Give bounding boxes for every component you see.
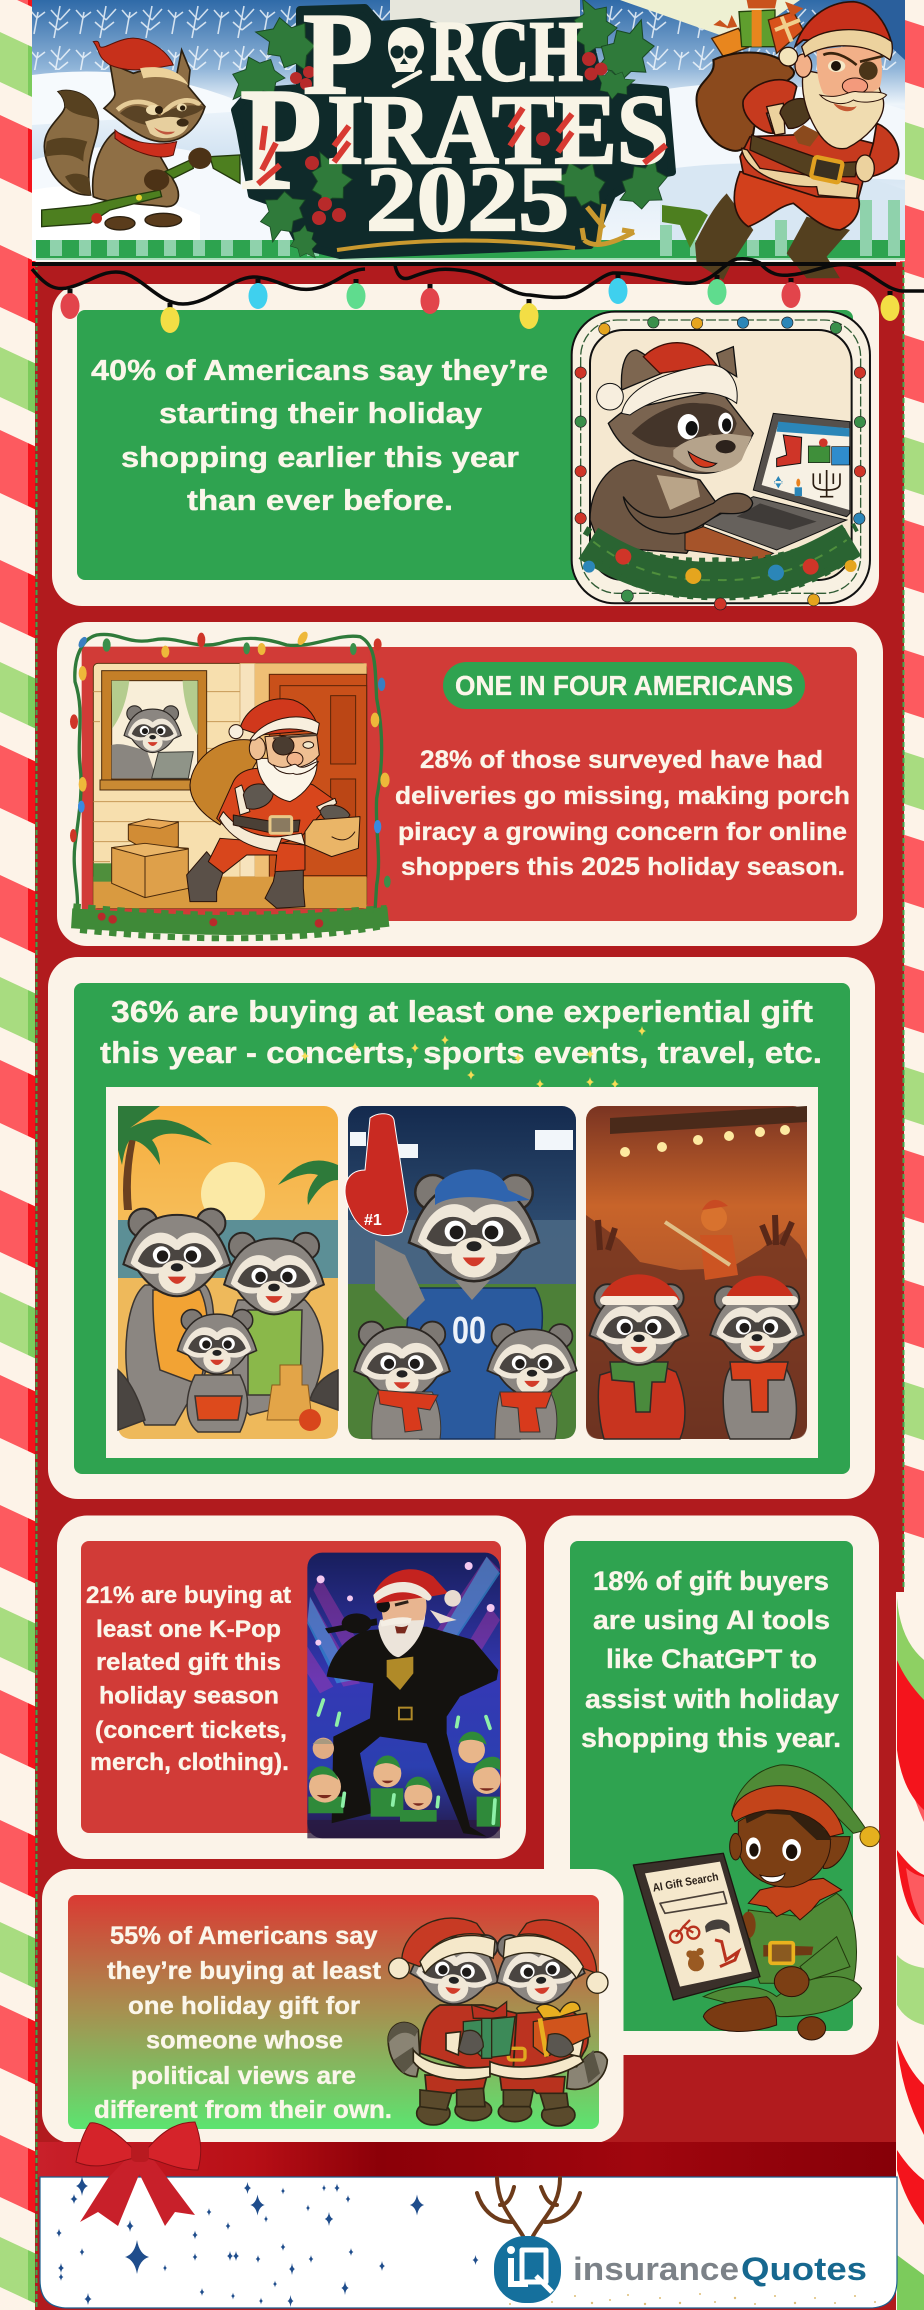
illustration: K-Pop Santa with elves [307,1553,501,1838]
foam finger: #1 [364,1212,382,1229]
holly and berries [225,0,672,263]
text: 55% stat: someone whose [146,2026,343,2054]
text: 21% stat: least one K-Pop [96,1616,281,1643]
illustration: elf with AI gift search tablet [633,1765,880,2040]
black divider [32,262,896,266]
stacked boxes [112,819,188,898]
scene: raccoon fans at a football stadium [345,1106,577,1439]
text: 18% stat: assist with holiday [585,1684,839,1714]
snowy background [32,0,905,261]
crowd [586,1215,807,1439]
header banner [32,0,905,280]
elves [308,1732,501,1827]
small raccoons' bodies [372,1390,557,1439]
panel: one in four Americans [57,622,883,946]
hats [389,1918,608,1993]
tablet: AI Gift Search [652,1871,720,1895]
palms [118,1106,338,1210]
santa figure [187,699,360,908]
gold swoosh and anchor [337,204,634,250]
gold glitter [509,2293,876,2305]
title logo: Porch Pirates 2025: 2025 [366,148,569,250]
text: 28% stat: deliveries go missing, making porch [395,782,850,810]
bulbs [60,274,900,333]
heading: 36% stat: this year - concerts, sports events, travel, etc. [100,1035,822,1070]
text: 21% stat [86,1582,291,1776]
illustration: Santa pirate stealing packages from a porch [70,630,391,938]
text: 28% stat: 28% of those surveyed have had [420,746,823,774]
vine frame with lights [74,634,382,915]
sandcastle and ornament [267,1365,321,1431]
holly garland bottom [72,907,388,938]
heads [407,1928,503,2009]
striped green fence [36,200,905,260]
tails [388,2022,607,2089]
raccoon with garland [42,38,240,230]
garland under Santa [662,205,708,248]
santa hats [600,1274,798,1305]
illustration: raccoon shopping on a laptop [572,312,870,610]
text: 40% stat: shopping earlier this year [121,442,519,474]
text: 18% stat: are using AI tools [593,1605,830,1635]
bodies [118,1285,338,1432]
panel: buying for different political views [42,1869,624,2143]
text: 21% stat: 21% are buying at [86,1582,291,1609]
logo: iQ badge [494,2236,561,2303]
text: 18% stat: 18% of gift buyers [593,1566,829,1596]
raccoon bodies [598,1360,796,1439]
heading: 36% stat [100,994,822,1070]
star field [56,2176,479,2307]
big raccoon fan [375,1169,542,1439]
badge: one in four Americans [443,662,805,709]
title logo: Porch Pirates 2025: RCH [430,3,583,99]
text: 28% stat [395,746,850,881]
scene: raccoon family at the beach [118,1106,338,1439]
panel: experiential gifts [48,957,875,1499]
icon: skull and bone [388,27,424,86]
coats [413,2005,588,2080]
text: 28% stat: piracy a growing concern for online [398,818,847,846]
text: 40% stat [91,355,548,517]
guitarist [665,1200,738,1280]
title logo: Porch Pirates 2025: P [240,58,322,220]
santa in black outfit [325,1569,498,1837]
candy stripes on letters [258,108,666,184]
title logo: Porch Pirates 2025: IRATES [327,74,669,185]
boots and legs [417,2075,575,2126]
string of holiday lights [32,259,924,333]
footer panel [40,2176,897,2308]
ribbon band [38,2142,896,2177]
text: 18% stat: shopping this year. [581,1723,841,1753]
panel: K-Pop gifts stat [57,1516,526,1859]
sparkles [301,1026,646,1089]
text: 55% stat: they’re buying at least [107,1957,382,1985]
illustration: two raccoons exchanging gifts [388,1918,608,2126]
toy icons [670,1920,738,1971]
scene: raccoons at a concert [586,1106,807,1439]
text: 55% stat: one holiday gift for [128,1992,360,2020]
text: 18% stat [581,1566,841,1753]
logo text: insuranceQuotes: Quotes [741,2251,867,2287]
icon: reindeer antlers [477,2178,580,2236]
window with raccoon [100,671,212,790]
text: 40% stat: 40% of Americans say they’re [91,355,548,387]
garland [583,527,857,597]
text: 21% stat: related gift this [96,1649,281,1676]
text: 18% stat: like ChatGPT to [606,1644,817,1674]
panel: early shopping stat [52,284,879,610]
text: 55% stat: 55% of Americans say [110,1922,378,1950]
laptop [685,413,850,560]
foam finger [345,1114,408,1236]
text: 21% stat: holiday season [99,1682,279,1710]
Santa pirate with sack [695,0,899,280]
text: 21% stat: (concert tickets, [95,1717,287,1744]
badge: one in four Americans: ONE IN FOUR AMERICANS [455,670,793,701]
text: 55% stat: political views are [131,2062,356,2090]
logo text: insuranceQuotes: insurance [573,2251,739,2287]
icon: red bow [76,2122,201,2226]
text: 40% stat: starting their holiday [159,398,482,430]
text: 55% stat [94,1922,392,2124]
panel: AI tools stat [544,1516,879,2055]
text: 40% stat: than ever before. [187,485,453,517]
text: 21% stat: merch, clothing). [90,1749,289,1776]
gifts [463,2002,590,2058]
heading: 36% stat: 36% are buying at least one experiential gift [111,994,813,1029]
text: 28% stat: shoppers this 2025 holiday season. [401,853,845,881]
tablet [633,1853,760,2000]
wire [32,259,924,304]
jersey number: 00 [452,1310,486,1352]
text: 55% stat: different from their own. [94,2096,392,2124]
frame lights [575,317,866,610]
logo text: insuranceQuotes [573,2251,867,2287]
title logo: Porch Pirates 2025 [225,0,672,263]
